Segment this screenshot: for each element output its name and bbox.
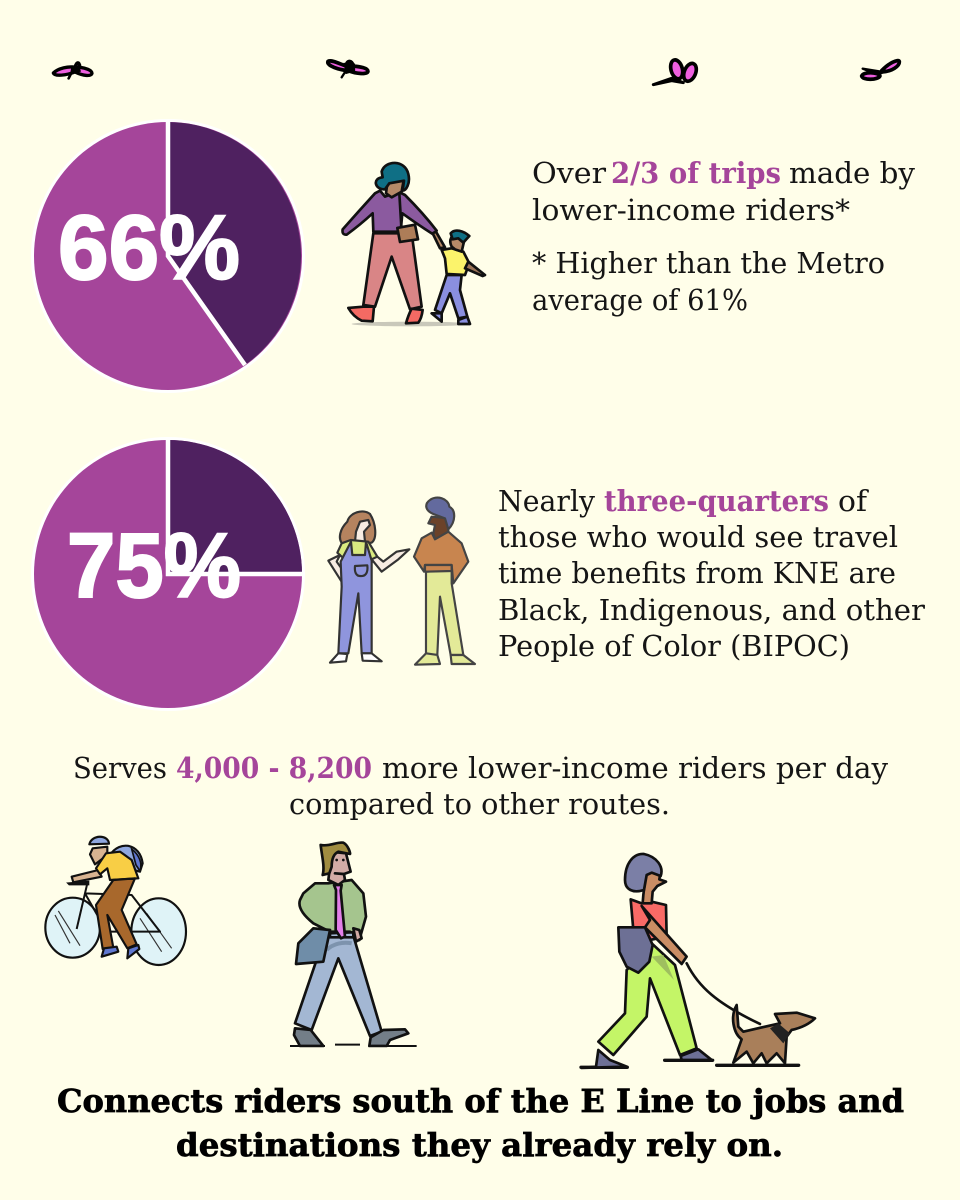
text block: lower-income riders: * Higher than the Metro — [532, 246, 885, 280]
text block: more lower-income riders per day: 4,000 - 8,200 — [176, 751, 372, 785]
text block: more lower-income riders per day: more lower-income riders per day — [382, 751, 889, 785]
illustration: cyclist — [45, 837, 186, 965]
icon: butterfly 4 — [862, 61, 899, 79]
text block: lower-income riders — [532, 156, 916, 317]
closing statement — [57, 1082, 904, 1164]
text block: lower-income riders: Over — [532, 156, 606, 190]
text block: lower-income riders: average of 61% — [532, 283, 748, 317]
text block: BIPOC riders: Nearly — [498, 484, 596, 518]
text block: lower-income riders: made by — [789, 156, 916, 190]
illustration: man walking with jacket — [290, 843, 417, 1046]
closing statement: destinations they already rely on. — [176, 1126, 783, 1164]
text block: more lower-income riders per day — [73, 751, 889, 821]
pie chart: 66% — [31, 119, 305, 393]
illustration: mother and child walking — [342, 163, 485, 326]
text block: lower-income riders: lower-income riders* — [532, 193, 851, 227]
illustration: woman walking dog — [581, 854, 815, 1068]
icon: butterfly 2 — [328, 61, 368, 77]
text block: BIPOC riders: Black, Indigenous, and other — [498, 593, 925, 627]
pie value: 66%: 66% — [58, 197, 240, 299]
text block: BIPOC riders: of — [838, 484, 869, 518]
text block: BIPOC riders: three-quarters — [604, 484, 829, 518]
icon: butterfly 3 — [653, 59, 699, 85]
text block: more lower-income riders per day: Serves — [73, 751, 167, 785]
text block: lower-income riders: 2/3 of trips — [611, 156, 781, 190]
pie value: 75%: 75% — [67, 515, 241, 617]
text block: BIPOC riders: those who would see travel — [498, 520, 898, 554]
text block: BIPOC riders: People of Color (BIPOC) — [498, 629, 850, 663]
text block: BIPOC riders: time benefits from KNE are — [498, 556, 896, 590]
closing statement: Connects riders south of the E Line to jobs and — [57, 1082, 904, 1120]
icon: butterfly 1 — [53, 63, 92, 78]
text block: BIPOC riders — [498, 484, 925, 663]
pie chart: 75% — [31, 437, 305, 711]
illustration: two people talking — [328, 498, 475, 665]
text block: more lower-income riders per day: compared to other routes. — [289, 787, 670, 821]
